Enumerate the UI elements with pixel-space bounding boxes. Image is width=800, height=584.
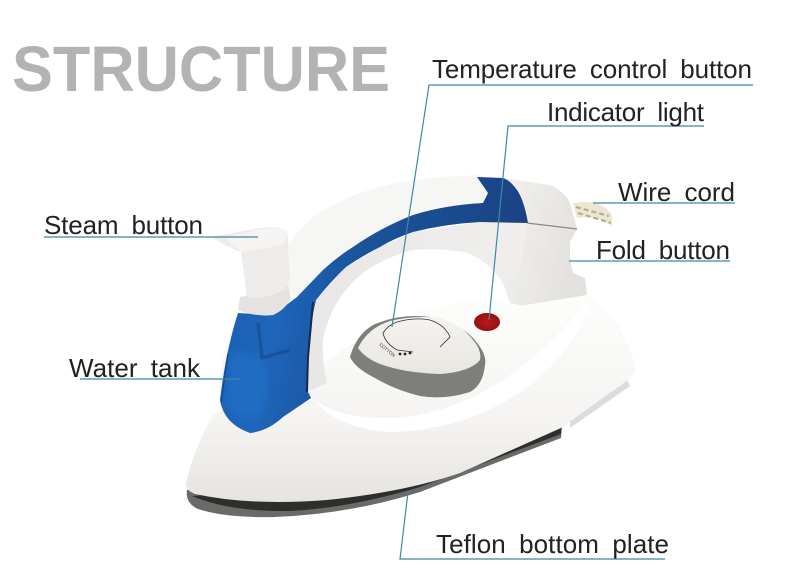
label: water tank: Water tank	[69, 353, 201, 383]
bottom plate	[187, 424, 562, 517]
iron illustration	[186, 175, 636, 517]
inner handle band	[307, 222, 527, 392]
water tank and blue handle band	[220, 177, 528, 433]
label: indicator light: Indicator light	[547, 97, 705, 127]
dial scale	[383, 319, 450, 352]
indicator light	[474, 313, 500, 331]
heel stand	[570, 380, 630, 428]
label: steam button: Steam button	[44, 210, 203, 240]
steam button	[212, 227, 291, 315]
title: STRUCTURE	[12, 33, 390, 105]
label: temperature control button: Temperature control button	[432, 54, 752, 84]
temperature dial	[350, 316, 485, 397]
handle seam	[527, 223, 577, 229]
label: temperature control button	[392, 54, 753, 327]
label: teflon bottom plate: Teflon bottom plate	[436, 529, 669, 559]
label: indicator light	[489, 97, 705, 320]
dial marking: COTTON	[378, 342, 396, 358]
body highlight ridge	[315, 300, 590, 432]
dial white top	[358, 317, 480, 374]
label: fold button: Fold button	[596, 235, 730, 265]
rear handle and neck	[470, 176, 587, 310]
wire cord	[573, 202, 612, 226]
dial gray base	[350, 316, 485, 397]
iron body	[186, 295, 636, 502]
white upper handle band	[288, 175, 490, 300]
label: teflon bottom plate	[400, 492, 669, 559]
label: wire cord: Wire cord	[618, 177, 735, 207]
